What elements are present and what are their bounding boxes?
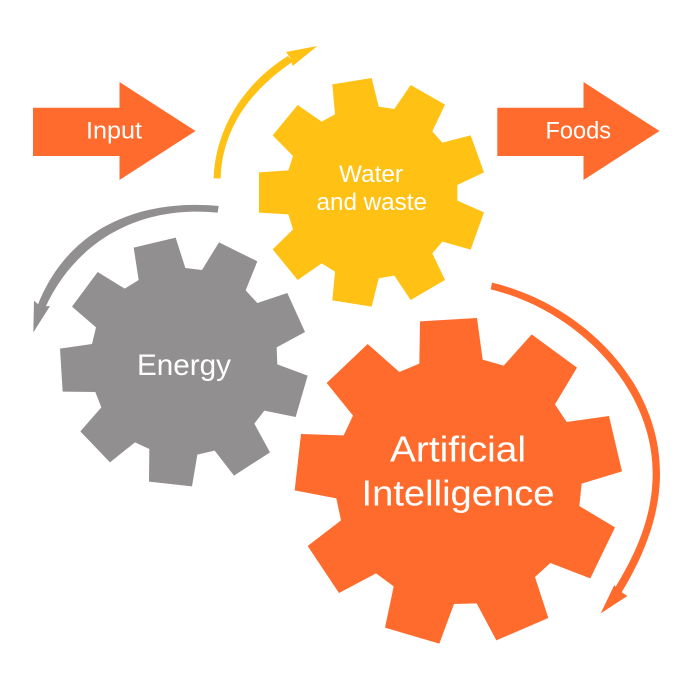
gear: Energy xyxy=(60,238,308,486)
arrow: Input xyxy=(33,82,196,180)
curved arrow: gray xyxy=(33,205,219,332)
arrow: Input: Input xyxy=(86,118,142,144)
gear: Artificial Intelligence: Intelligence xyxy=(362,473,554,514)
gear: Artificial Intelligence: Artificial xyxy=(390,429,526,470)
curved arrow: yellow xyxy=(214,46,317,178)
arrow: Foods: Foods xyxy=(546,118,611,144)
curved arrow: orange xyxy=(491,283,660,613)
gear: Water and waste: Water xyxy=(339,161,403,188)
gear: Water and waste xyxy=(259,78,484,307)
arrow: Foods xyxy=(497,82,660,180)
gear: Artificial Intelligence xyxy=(295,318,622,644)
gear: Water and waste: and waste xyxy=(316,189,427,216)
gear: Energy: Energy xyxy=(137,349,231,382)
